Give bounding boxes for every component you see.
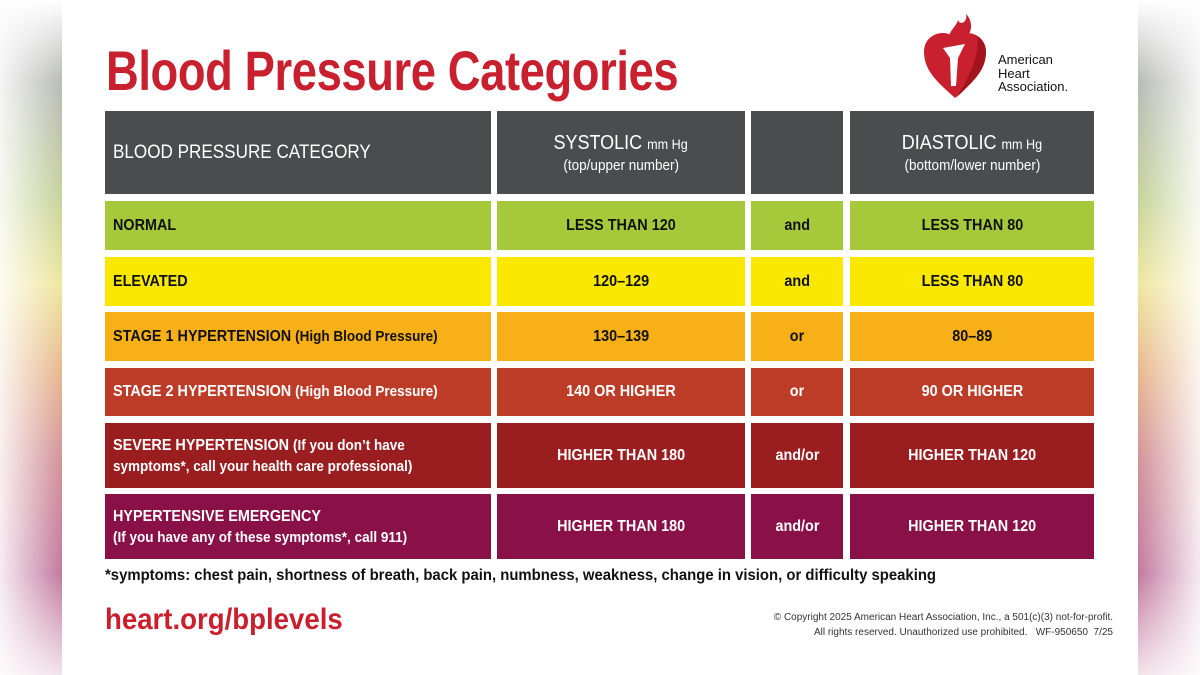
text: SYSTOLIC mm Hg [554,132,688,154]
row: severe [105,423,1094,488]
text: BLOOD PRESSURE CATEGORY [113,142,371,162]
copyright: © Copyright 2025 American Heart Association, Inc., a 501(c)(3) not-for-profit. [774,612,1113,623]
row: emergency [105,494,1094,559]
text: HIGHER THAN 120 [908,446,1036,464]
text: 140 OR HIGHER [566,383,676,400]
text: and/or [775,446,819,464]
text: HIGHER THAN 120 [908,518,1036,534]
text: SEVERE HYPERTENSION (If you don’t have [113,436,405,454]
text: 90 OR HIGHER [921,383,1023,400]
text: or [790,383,804,400]
text: or [790,328,804,344]
text: symptoms*, call your health care professional) [113,458,412,474]
text: 80–89 [952,328,992,344]
url: heart.org/bplevels [105,603,343,636]
copyright: All rights reserved. Unauthorized use prohibited. WF-950650 7/25 [814,627,1113,638]
text: LESS THAN 120 [566,216,676,234]
table header [105,111,1094,194]
row: normal [105,201,1094,250]
text: 120–129 [593,272,649,290]
logo: American Heart Association: American [998,52,1053,67]
text: (top/upper number) [563,156,679,174]
text: LESS THAN 80 [921,216,1023,234]
text: (bottom/lower number) [904,156,1040,174]
footnote: *symptoms: chest pain, shortness of breath, back pain, numbness, weakness, change in vision, or difficulty speaking [105,567,936,584]
text: (If you have any of these symptoms*, call 911) [113,528,407,546]
logo: American Heart Association [924,14,1068,98]
text: and/or [775,518,819,534]
text: NORMAL [113,216,176,234]
text: and [784,272,810,290]
logo: American Heart Association: Heart [998,66,1030,80]
text: HIGHER THAN 180 [557,446,685,464]
copyright [774,612,1113,638]
row: stage 2 [105,368,1094,416]
title: Blood Pressure Categories [106,39,678,102]
row: stage 1 [105,312,1094,361]
text: ELEVATED [113,272,188,290]
text: and [784,216,810,234]
text: 130–139 [593,328,649,344]
text: DIASTOLIC mm Hg [902,132,1042,154]
text: STAGE 1 HYPERTENSION (High Blood Pressure) [113,328,438,344]
logo: American Heart Association: Association. [998,79,1068,94]
row: elevated [105,257,1094,306]
text: HIGHER THAN 180 [557,518,685,534]
text: HYPERTENSIVE EMERGENCY [113,508,321,524]
text: LESS THAN 80 [921,272,1023,290]
text: STAGE 2 HYPERTENSION (High Blood Pressure) [113,383,438,400]
